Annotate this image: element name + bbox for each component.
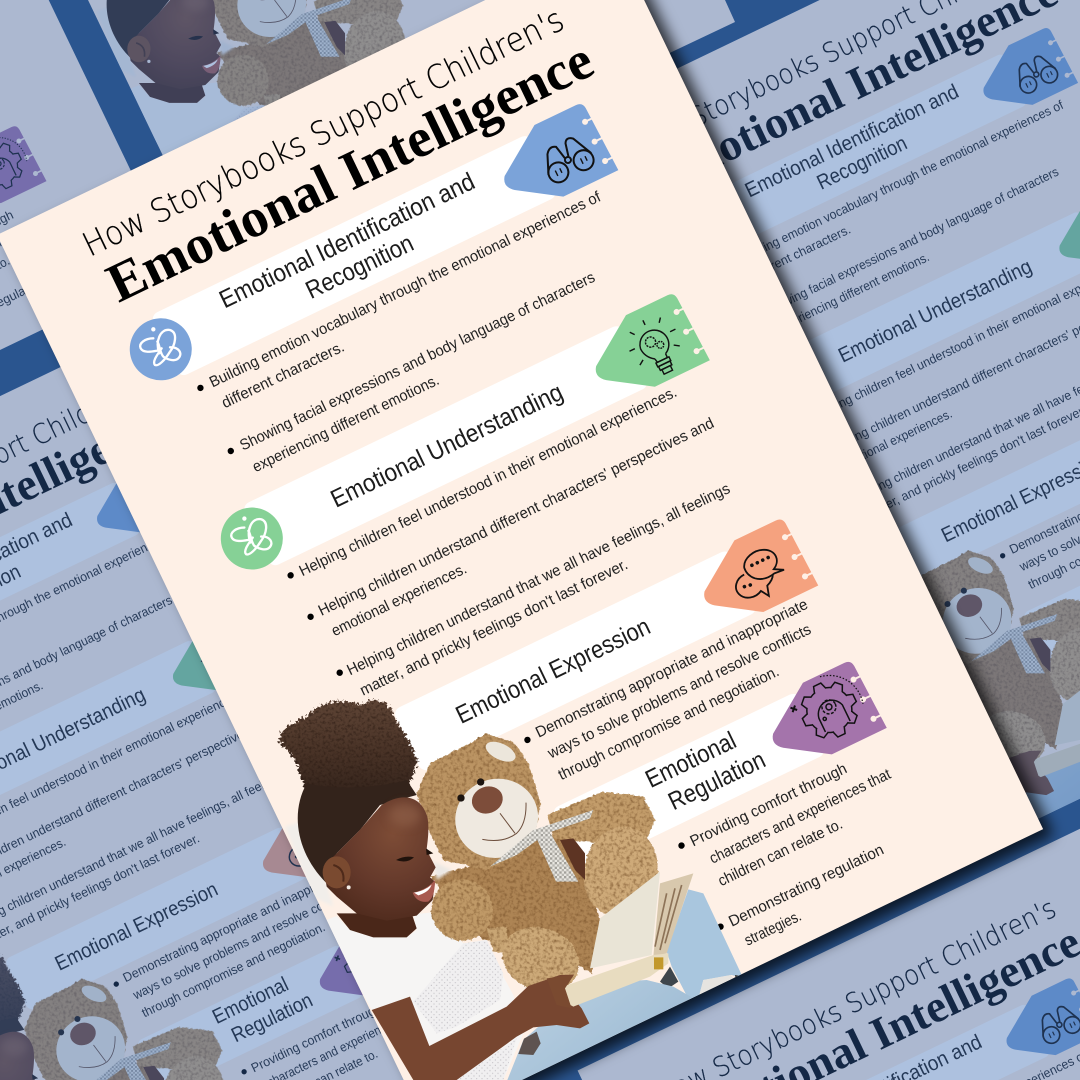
tag: orange speech bubbles icon bbox=[688, 516, 818, 632]
banner: Emotional Understanding bbox=[242, 324, 650, 568]
shirt bbox=[327, 913, 523, 1080]
heading: Emotional Regulation bbox=[641, 719, 770, 821]
bear smile bbox=[482, 803, 526, 840]
bullet dots bbox=[196, 282, 725, 1033]
ear bbox=[323, 856, 351, 888]
bullet list: identification: different characters. bbox=[219, 339, 347, 412]
bullet list: understanding: Helping children feel understood in their emotional experiences. bbox=[297, 384, 680, 580]
eye bbox=[396, 857, 414, 861]
heading: Emotional Understanding: Emotional Understanding bbox=[326, 378, 567, 513]
background poster copy: far left bbox=[0, 0, 176, 512]
logo circle: blue bbox=[119, 308, 202, 391]
background poster copy: left: through compromise and negotiation. bbox=[139, 919, 327, 1020]
bullet list: expression: ways to solve problems and resolve conflicts bbox=[544, 621, 814, 763]
background poster copy: photo at top left bbox=[0, 0, 777, 415]
tag: green light bulb icon bbox=[579, 291, 710, 407]
bear bow bbox=[490, 810, 593, 882]
background poster copy: top right: experiencing different emotions. bbox=[772, 249, 932, 336]
neck bbox=[337, 913, 417, 937]
background poster copy: bottom right bbox=[578, 824, 1080, 1080]
background poster copy: top right bbox=[457, 0, 1080, 1031]
logo circle: green bbox=[210, 497, 293, 580]
bear ear bbox=[483, 738, 519, 766]
gap between bear and face bbox=[433, 862, 452, 880]
bullet list: understanding: Helping children understand different characters' perspectives and bbox=[316, 415, 717, 620]
fingers over book bbox=[547, 975, 574, 1008]
background poster copy: top right: Emotional Identification and bbox=[742, 80, 962, 202]
background poster copy: left: Emotional Expression bbox=[51, 878, 222, 975]
hair puff bbox=[278, 700, 417, 798]
heading: Emotional Identification and Recognition: Emotional Identification and bbox=[215, 167, 479, 314]
background poster copy: top right: Building emotion vocabulary through the emotional experiences of bbox=[736, 97, 1066, 266]
bullet list: regulation: strategies. bbox=[742, 908, 804, 949]
background poster copy: left: Demonstrating appropriate and inappropriate bbox=[120, 864, 351, 985]
bullet list: understanding: Helping children understand that we all have feelings, all feelings bbox=[344, 480, 733, 679]
bullet list: expression: Demonstrating appropriate and inappropriate bbox=[533, 596, 811, 741]
bullet list: identification: Building emotion vocabulary through the emotional experiences of bbox=[207, 188, 604, 391]
bullet list: identification: experiencing different emotions. bbox=[250, 372, 442, 476]
bullet list: regulation: Providing comfort through bbox=[687, 760, 850, 850]
background poster copy: top right: Showing facial expressions and body language of characters bbox=[761, 164, 1061, 318]
background poster copy: left: ways to solve problems and resolve conflicts bbox=[130, 884, 354, 1003]
background poster copy: left: Providing comfort through bbox=[249, 1000, 384, 1075]
background poster copy: top right: Emotional Understanding bbox=[835, 255, 1035, 367]
tag: purple gear head icon bbox=[756, 659, 887, 775]
title line two: Emotional Intelligence bbox=[97, 29, 602, 314]
bear nose bbox=[468, 782, 507, 818]
bullet list: regulation bbox=[687, 744, 933, 952]
banner: Emotional Regulation bbox=[551, 691, 827, 872]
bear muzzle bbox=[444, 767, 549, 870]
background poster: top edge fragment bbox=[560, 0, 735, 105]
tag: blue binoculars icon bbox=[488, 101, 618, 217]
photo: girl reading with teddy bear bbox=[110, 517, 915, 1080]
jeans bbox=[503, 889, 747, 1080]
background poster copy: left: Regulation bbox=[228, 989, 316, 1047]
bullet list: regulation: children can relate to. bbox=[715, 816, 845, 890]
banner: Emotional Identification bbox=[150, 133, 558, 378]
teddy bear bbox=[417, 733, 666, 1003]
bullet list: regulation: Demonstrating regulation bbox=[726, 841, 887, 930]
heading: Emotional Regulation: Regulation bbox=[664, 746, 770, 816]
background poster copy: left bbox=[0, 308, 596, 1080]
bullet list: regulation: characters and experiences that bbox=[707, 766, 894, 868]
bear eyes bbox=[457, 778, 484, 802]
heading: Emotional Regulation: Emotional bbox=[641, 726, 741, 794]
background poster copy: top right: Recognition bbox=[813, 132, 911, 194]
background poster copy: top right: emotional experiences. bbox=[837, 406, 954, 473]
bullet list: understanding: emotional experiences. bbox=[329, 560, 470, 640]
bullet list: identification: Showing facial expressions and body language of characters bbox=[237, 269, 598, 454]
book pages bbox=[590, 872, 660, 968]
heading: Emotional Expression: Emotional Expression bbox=[451, 612, 655, 730]
book cover bbox=[553, 953, 668, 1007]
shirt lace bbox=[413, 940, 503, 1033]
arm and hand bbox=[372, 975, 589, 1080]
background poster copy: left: Emotional bbox=[209, 973, 292, 1029]
banner: Emotional Expression bbox=[392, 549, 758, 773]
heading: Emotional Identification and Recognition: Recognition bbox=[301, 229, 418, 305]
bullet list: understanding bbox=[297, 375, 756, 701]
bullet list: understanding: matter, and prickly feelings don't last forever. bbox=[357, 556, 631, 699]
face bbox=[323, 797, 436, 921]
bullet list: identification bbox=[207, 188, 645, 477]
bullet list: expression: through compromise and negotiation. bbox=[556, 663, 782, 784]
hair back bbox=[298, 780, 417, 883]
hand behind paw bbox=[560, 838, 585, 880]
forehead highlight bbox=[389, 803, 421, 827]
mouth bbox=[413, 880, 435, 902]
earring bbox=[347, 885, 351, 889]
background poster copy: top right: different characters. bbox=[746, 222, 853, 283]
photo remnant background bbox=[285, 820, 333, 907]
